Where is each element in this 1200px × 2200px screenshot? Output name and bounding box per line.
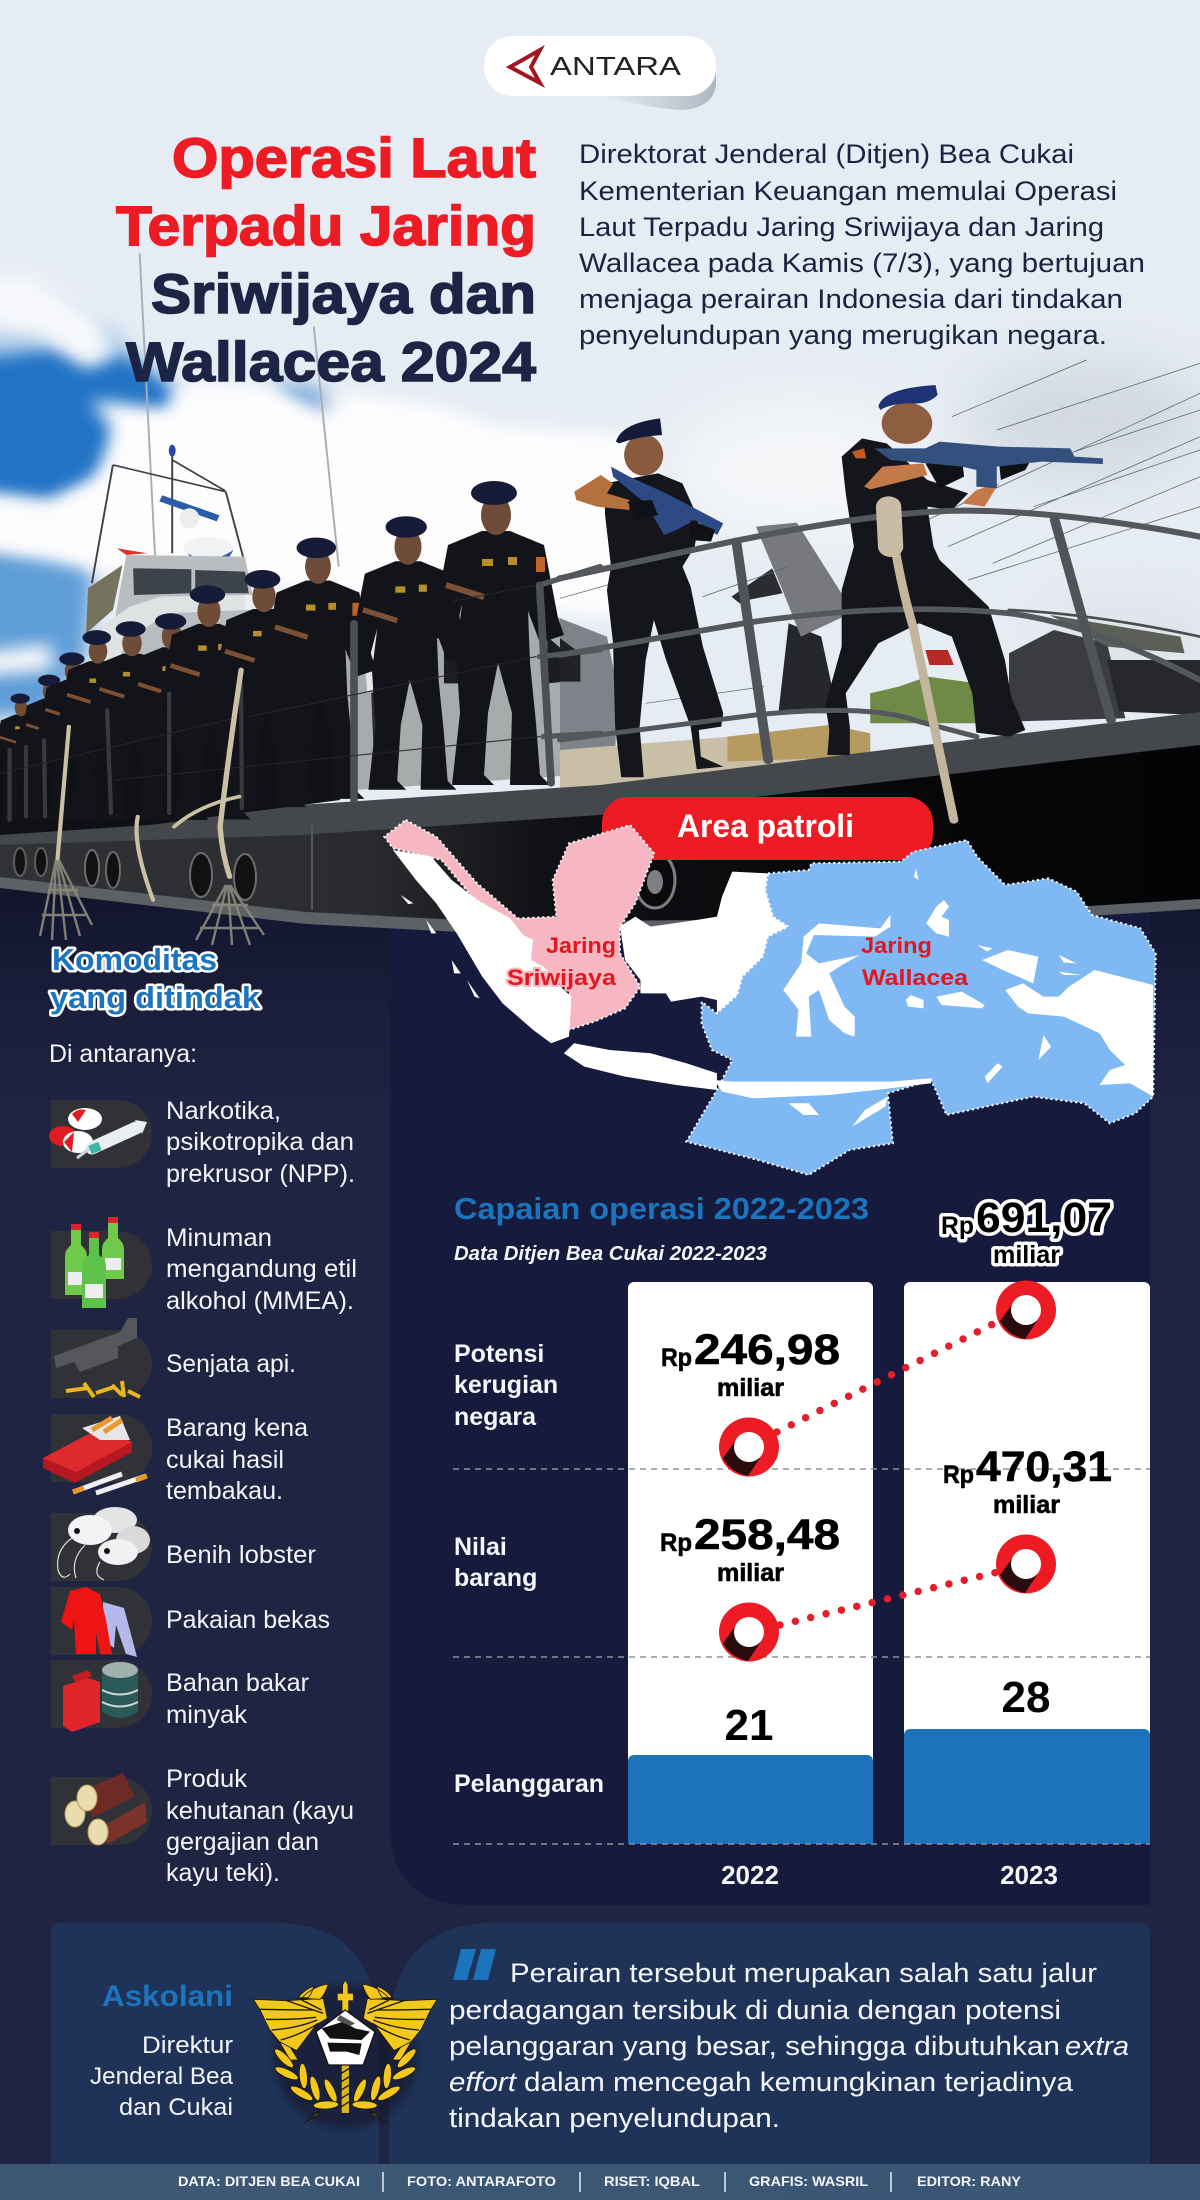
title: Sriwijaya dan (151, 262, 536, 325)
emblem: sword and shield (316, 1980, 375, 2113)
value: Rp470,31 miliar (943, 1443, 1112, 1519)
intro paragraph: Direktorat Jenderal (Ditjen) Bea Cukai (579, 139, 1074, 169)
footer credits (0, 2164, 1200, 2200)
commodity: pakaian bekas (51, 1587, 330, 1657)
commodity: narkotika (49, 1097, 355, 1188)
photo: deck equipment and horizon (560, 360, 1200, 790)
intro paragraph (579, 139, 1145, 350)
photo: ship hull (0, 712, 1200, 934)
photo: rear cabin (306, 603, 600, 793)
map labels: Jaring (861, 933, 932, 958)
dotted trend: nilai barang (780, 1572, 998, 1625)
map labels: Wallacea (862, 965, 969, 990)
value: Rp258,48 miliar (660, 1511, 840, 1587)
commodity: narkotika: prekrusor (NPP). (166, 1160, 355, 1188)
value: Rp470,31 miliar: 470,31 (976, 1443, 1112, 1491)
row labels (454, 1340, 604, 1798)
photo: crew in uniform (0, 385, 1103, 835)
column 2023 (904, 1282, 1150, 1844)
axis labels: 2022 (721, 1860, 779, 1890)
intro paragraph: Kementerian Keuangan memulai Operasi (579, 176, 1117, 206)
title (116, 126, 536, 393)
commodity: senjata api (51, 1318, 296, 1398)
marker: potensi 2023 (996, 1280, 1056, 1340)
value: Rp246,98 miliar: 246,98 (694, 1326, 840, 1374)
commodity: senjata api: Senjata api. (166, 1350, 296, 1378)
commodity: produk kehutanan: kayu teki). (166, 1859, 280, 1887)
axis labels: 2023 (1000, 1860, 1058, 1890)
value: Rp470,31 miliar: miliar (993, 1491, 1060, 1519)
map: islands (564, 868, 1153, 1127)
commodity: minuman (51, 1217, 357, 1315)
value: Rp258,48 miliar: 258,48 (694, 1511, 840, 1559)
row labels: kerugian (454, 1371, 558, 1399)
marker: potensi 2022 (719, 1418, 779, 1476)
panel: quote: extra (1065, 2031, 1129, 2061)
badge: area patroli: Area patroli (677, 808, 854, 844)
commodity: benih lobster: Benih lobster (166, 1541, 316, 1569)
emblem: Bea Cukai (253, 1980, 437, 2128)
panel: quote: Perairan tersebut merupakan salah satu jalur (510, 1958, 1097, 1988)
icon: quote mark (453, 1949, 496, 1980)
heading: capaian operasi: Capaian operasi 2022-2023 (454, 1191, 869, 1226)
intro paragraph: penyelundupan yang merugikan negara. (579, 320, 1107, 350)
map labels: Jaring (546, 933, 616, 958)
photo: mast and radar (92, 253, 339, 593)
axis labels (721, 1860, 1058, 1890)
footer credits: DATA: DITJEN BEA CUKAI (178, 2173, 360, 2189)
commodity: pakaian bekas: Pakaian bekas (166, 1606, 330, 1634)
commodity: produk kehutanan (51, 1765, 354, 1887)
value: Rp470,31 miliar: Rp (943, 1461, 974, 1489)
commodity: produk kehutanan: gergajian dan (166, 1828, 319, 1856)
panel: speaker (51, 1923, 379, 2164)
value: Rp246,98 miliar (661, 1326, 840, 1402)
badge: area patroli (602, 797, 933, 860)
text: di antaranya: Di antaranya: (49, 1040, 197, 1068)
panel: speaker: Askolani (102, 1980, 233, 2013)
soldier with rifle, left (574, 418, 723, 777)
footer credits: RISET: IQBAL (604, 2173, 700, 2189)
panel: quote: effort (449, 2067, 518, 2097)
column 2022 (628, 1282, 873, 1844)
bar: pelanggaran 2023 (904, 1729, 1150, 1844)
intro paragraph: Wallacea pada Kamis (7/3), yang bertujuan (579, 248, 1145, 278)
row labels: Pelanggaran (454, 1770, 604, 1798)
commodity: narkotika: psikotropika dan (166, 1128, 354, 1156)
panel: quote: perdagangan tersibuk di dunia dengan potensi (449, 1995, 1061, 2025)
panel: speaker: Jenderal Bea (90, 2063, 234, 2090)
value: Rp691,07 miliar: 691,07 (976, 1194, 1112, 1242)
map labels (507, 933, 969, 990)
commodity: minuman: alkohol (MMEA). (166, 1287, 354, 1315)
commodity: hasil tembakau: cukai hasil (166, 1446, 284, 1474)
value: Rp691,07 miliar: miliar (993, 1241, 1060, 1269)
panel: quote (389, 1923, 1150, 2164)
value: Rp691,07 miliar: Rp (941, 1212, 974, 1240)
map: patrol areas (384, 820, 1156, 1175)
map: Jaring Wallacea area (686, 840, 1156, 1175)
footer credits: GRAFIS: WASRIL (749, 2173, 868, 2189)
emblem: right wing and wreath (351, 1984, 437, 2123)
map: Kalimantan (620, 872, 788, 1013)
commodity: bahan bakar minyak: Bahan bakar (166, 1669, 309, 1697)
value: Rp246,98 miliar: miliar (717, 1374, 784, 1402)
commodity: hasil tembakau (43, 1414, 308, 1505)
row labels: barang (454, 1564, 537, 1592)
panel: speaker: Direktur (142, 2032, 233, 2059)
intro paragraph: menjaga perairan Indonesia dari tindakan (579, 284, 1123, 314)
lower background under hull (0, 860, 1200, 1120)
marker: nilai 2022 (719, 1602, 779, 1662)
value: Rp691,07 miliar (941, 1194, 1112, 1269)
commodity: minuman: mengandung etil (166, 1255, 357, 1283)
photo: railing and rope, right (560, 507, 1200, 820)
subheading: data source: Data Ditjen Bea Cukai 2022-2023 (454, 1243, 767, 1265)
emblem: left wing and wreath (253, 1984, 340, 2123)
photo: railing and ropes, left (0, 567, 600, 900)
commodity: benih lobster (51, 1507, 316, 1581)
commodity: produk kehutanan: Produk (166, 1765, 248, 1793)
dark panel: operation results (390, 880, 1150, 1905)
title: Terpadu Jaring (116, 194, 536, 257)
map labels: Sriwijaya (507, 965, 617, 990)
commodity: bahan bakar minyak (51, 1660, 309, 1732)
panel: speaker: dan Cukai (119, 2094, 233, 2121)
dotted trend: potensi kerugian (777, 1324, 993, 1432)
row labels: Nilai (454, 1533, 507, 1561)
panel: quote: tindakan penyelundupan. (449, 2103, 780, 2133)
heading: komoditas (50, 942, 261, 1015)
row labels: negara (454, 1403, 537, 1431)
bar: pelanggaran 2022 (628, 1755, 873, 1844)
map: Sumatra (393, 850, 572, 1043)
panel: quote: dalam mencegah kemungkinan terjadinya (524, 2067, 1074, 2097)
map: Jaring Sriwijaya area (384, 820, 654, 1030)
value: Rp258,48 miliar: miliar (717, 1559, 784, 1587)
soldier with rifle, right (825, 385, 1103, 755)
logo: ANTARA (484, 36, 716, 110)
value: pelanggaran 21: 21 (725, 1701, 773, 1750)
footer credits: FOTO: ANTARAFOTO (407, 2173, 556, 2189)
value: pelanggaran 28: 28 (1002, 1673, 1050, 1722)
photo: sky and clouds (0, 0, 1200, 830)
commodity: hasil tembakau: Barang kena (166, 1414, 308, 1442)
heading: komoditas: yang ditindak (50, 980, 261, 1015)
heading: komoditas: Komoditas (52, 942, 217, 977)
marker: nilai 2023 (996, 1534, 1056, 1594)
value: Rp246,98 miliar: Rp (661, 1344, 692, 1372)
commodity: bahan bakar minyak: minyak (166, 1701, 248, 1729)
title: Operasi Laut (172, 126, 536, 189)
commodity: produk kehutanan: kehutanan (kayu (166, 1797, 354, 1825)
intro paragraph: Laut Terpadu Jaring Sriwijaya dan Jaring (579, 212, 1104, 242)
photo: ship superstructure (86, 555, 306, 720)
value: Rp258,48 miliar: Rp (660, 1529, 692, 1557)
footer credits: EDITOR: RANY (917, 2173, 1022, 2189)
commodity: minuman: Minuman (166, 1224, 272, 1252)
title: Wallacea 2024 (126, 330, 536, 393)
commodity: hasil tembakau: tembakau. (166, 1477, 283, 1505)
logo: ANTARA: ANTARA (550, 51, 682, 81)
row labels: Potensi (454, 1340, 544, 1368)
panel: quote: pelanggaran yang besar, sehingga dibutuhkan (449, 2031, 1060, 2061)
commodity: narkotika: Narkotika, (166, 1097, 281, 1125)
photo: rope netting over hull (40, 860, 264, 945)
